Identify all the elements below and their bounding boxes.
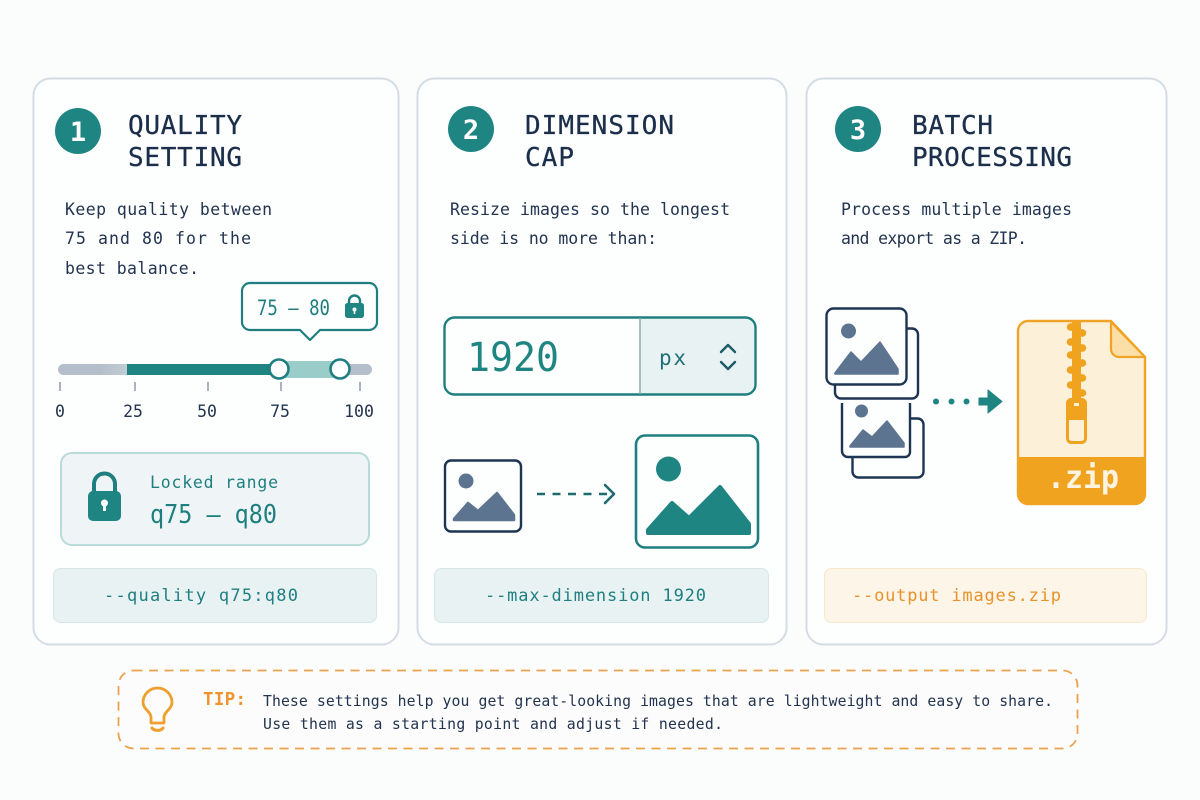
tip text bbox=[263, 693, 1053, 733]
step badge 3 bbox=[835, 106, 881, 152]
quality slider bbox=[55, 360, 374, 421]
card background bbox=[806, 78, 1166, 644]
step badge 1: 1 bbox=[70, 117, 86, 148]
locked range box: Locked range bbox=[150, 473, 278, 492]
arrow: dashed scale bbox=[537, 485, 614, 503]
tip label: TIP: bbox=[203, 690, 246, 710]
quality slider: 0 bbox=[55, 402, 65, 421]
step badge 2 bbox=[448, 106, 494, 152]
description text: Resize images so the longest bbox=[450, 200, 730, 219]
description text: Process multiple images bbox=[841, 200, 1072, 219]
quality slider: 25 bbox=[123, 402, 143, 421]
command: quality bbox=[54, 568, 376, 622]
heading: batch processing bbox=[912, 111, 1072, 173]
card background bbox=[34, 78, 398, 644]
icon: zip file: .zip bbox=[1047, 458, 1119, 496]
icon: image stack bbox=[826, 308, 924, 478]
locked range box: q75 – q80 bbox=[150, 500, 277, 530]
tooltip: 75 - 80 bbox=[242, 283, 377, 340]
tip text: Use them as a starting point and adjust if needed. bbox=[263, 716, 723, 733]
heading: dimension cap bbox=[525, 111, 674, 173]
heading: dimension cap: DIMENSION bbox=[525, 111, 674, 141]
panel: quality setting bbox=[34, 78, 398, 644]
icon: small image bbox=[445, 460, 521, 532]
heading: batch processing: BATCH bbox=[912, 111, 993, 141]
heading: quality setting: QUALITY bbox=[128, 111, 242, 141]
heading: batch processing: PROCESSING bbox=[912, 143, 1072, 173]
quality slider: 75 bbox=[270, 402, 290, 421]
step badge 3: 3 bbox=[850, 115, 866, 146]
quality slider: 100 bbox=[344, 402, 374, 421]
description text: best balance. bbox=[65, 259, 199, 278]
arrow: dotted to zip bbox=[933, 390, 1002, 413]
description text: 75 and 80 for the bbox=[65, 229, 251, 248]
tooltip: 75 - 80: 75 – 80 bbox=[257, 296, 330, 320]
heading: dimension cap: CAP bbox=[525, 143, 574, 173]
card background bbox=[418, 78, 786, 644]
description text bbox=[65, 200, 272, 278]
command: quality: --quality q75:q80 bbox=[104, 586, 298, 606]
tip text: These settings help you get great-looking images that are lightweight and easy to share. bbox=[263, 693, 1053, 710]
dimension input bbox=[444, 318, 756, 394]
description text bbox=[450, 200, 730, 248]
icon: light bulb bbox=[143, 688, 172, 730]
panel: dimension cap bbox=[418, 78, 786, 644]
description text: and export as a ZIP. bbox=[841, 229, 1027, 248]
dimension input: px bbox=[659, 346, 686, 370]
icon: large image bbox=[636, 436, 758, 548]
heading: quality setting bbox=[128, 111, 242, 173]
command: output: --output images.zip bbox=[852, 586, 1061, 606]
locked range box bbox=[61, 453, 369, 545]
callout: tip bbox=[118, 670, 1078, 748]
dashed tip border bbox=[118, 670, 1078, 748]
command: max dimension bbox=[434, 568, 768, 622]
description text: side is no more than: bbox=[450, 229, 657, 248]
command: output bbox=[824, 568, 1146, 622]
description text bbox=[841, 200, 1072, 248]
panel: batch processing bbox=[806, 78, 1166, 644]
dimension input: 1920 bbox=[467, 335, 559, 381]
step badge 2: 2 bbox=[463, 115, 479, 146]
description text: Keep quality between bbox=[65, 200, 272, 219]
heading: quality setting: SETTING bbox=[128, 143, 242, 173]
icon: zip file bbox=[1018, 321, 1146, 504]
quality slider: 50 bbox=[197, 402, 217, 421]
command: max dimension: --max-dimension 1920 bbox=[485, 586, 706, 606]
step badge 1 bbox=[55, 108, 101, 154]
